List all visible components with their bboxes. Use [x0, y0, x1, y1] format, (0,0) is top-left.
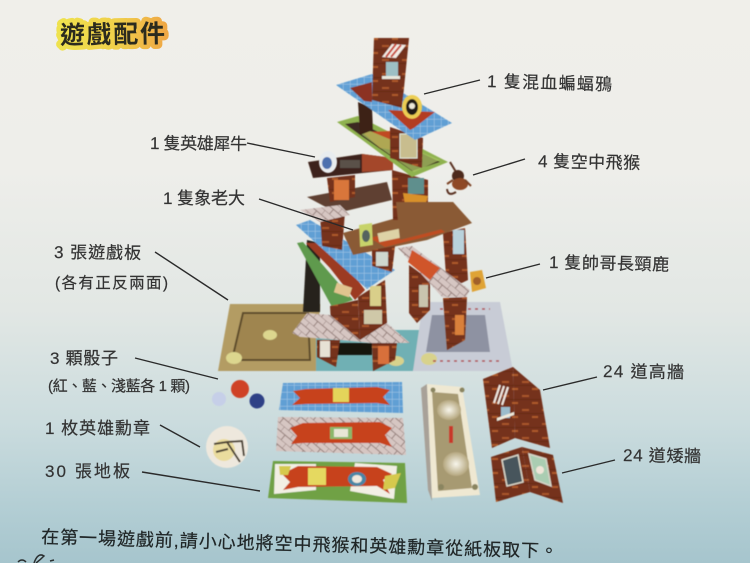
lower pillars — [320, 212, 395, 272]
label: boards note: (各有正反兩面) — [55, 274, 168, 292]
tower middle left walls — [297, 240, 430, 340]
label: monkey: 4 隻空中飛猴 — [538, 152, 640, 173]
upper floor level — [300, 170, 470, 240]
tower bottom walls — [317, 297, 467, 371]
right wall — [443, 228, 468, 290]
top brick wall — [372, 38, 409, 108]
label: rhino: 1 隻英雄犀牛 — [150, 134, 247, 154]
decorative scribble bottom left — [18, 555, 54, 563]
dark plate floor — [308, 154, 393, 178]
label: low wall: 24 道矮牆 — [623, 446, 701, 466]
central pillar — [358, 102, 423, 168]
blue tiled slope — [296, 220, 395, 289]
center board stack — [421, 384, 480, 501]
green plate — [337, 116, 448, 177]
icon: hero rhino — [319, 151, 337, 173]
pink slope — [398, 246, 470, 297]
label: bat crow: 1 隻混血蝙蝠鴉 — [487, 72, 612, 94]
icon: giraffe — [470, 270, 486, 292]
tower — [292, 38, 472, 371]
label: giraffe: 1 隻帥哥長頸鹿 — [549, 253, 669, 275]
floor tile: stone — [276, 417, 406, 455]
title: 遊戲配件 — [60, 20, 165, 50]
label: dice: 3 顆骰子 — [50, 349, 118, 368]
hero medal — [206, 426, 248, 468]
label: elephant: 1 隻象老大 — [163, 189, 245, 208]
center big wall — [358, 280, 387, 340]
pink star platform — [292, 313, 410, 343]
game boards — [218, 302, 513, 371]
label: dice note: (紅、藍、淺藍各 1 顆) — [48, 378, 190, 395]
label: high wall: 24 道高牆 — [603, 362, 684, 382]
leader lines — [135, 80, 615, 491]
icon: hybrid bat crow — [402, 95, 422, 119]
high wall — [483, 367, 550, 448]
blue roof — [336, 74, 452, 140]
footnote: 在第一場遊戲前,請小心地將空中飛猴和英雄勳章從紙板取下。 — [41, 527, 558, 561]
brown roof — [343, 202, 472, 255]
label: floor: 30 張地板 — [45, 462, 130, 481]
dice — [212, 380, 264, 408]
icon: elephant boss — [359, 223, 373, 247]
label: boards: 3 張遊戲板 — [54, 243, 141, 263]
floor tile: grass — [268, 461, 407, 503]
low wall — [491, 447, 563, 503]
label: medal: 1 枚英雄勳章 — [45, 419, 150, 438]
floor tile: blue — [279, 382, 403, 413]
icon: sky monkey — [447, 162, 471, 194]
